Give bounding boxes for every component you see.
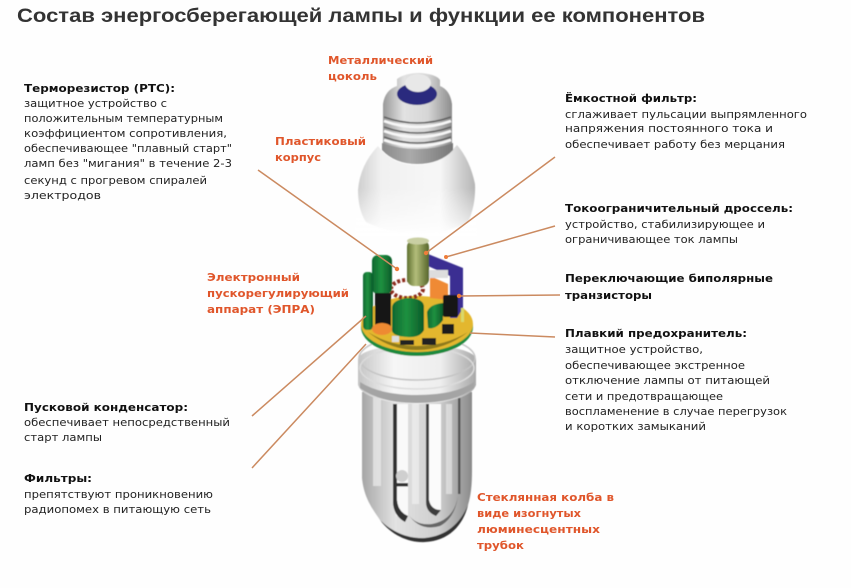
- text block: filters: Фильтры:: [24, 473, 92, 485]
- text block: capacitive filter: обеспечивает работу без мерцания: [565, 139, 785, 151]
- text block: filters: радиопомех в питающую сеть: [24, 504, 211, 516]
- text block: filters: [24, 473, 213, 516]
- choke: [428, 254, 463, 318]
- text block: fuse: и коротких замыканий: [565, 421, 706, 433]
- text block: thermistor: положительным температурным: [24, 113, 223, 125]
- label: electronic ballast: аппарат (ЭПРА): [207, 304, 315, 316]
- text block: starter capacitor: Пусковой конденсатор:: [24, 402, 188, 414]
- label: metal base: Металлический: [328, 55, 433, 67]
- label: metal base: [328, 55, 433, 83]
- label: metal base: цоколь: [328, 71, 377, 83]
- label: glass tube: виде изогнутых: [477, 508, 581, 520]
- text block: thermistor: Терморезистор (РТС):: [24, 83, 175, 95]
- collar: [358, 336, 476, 404]
- text block: capacitive filter: сглаживает пульсации выпрямленного: [565, 109, 807, 121]
- label: plastic housing: Пластиковый: [275, 136, 366, 148]
- illustration: energy-saving lamp exploded view: [355, 73, 477, 542]
- text block: choke: [565, 203, 793, 246]
- label: glass tube: трубок: [477, 540, 524, 552]
- electronic ballast: [361, 238, 473, 356]
- text block: filters: препятствуют проникновению: [24, 489, 213, 501]
- text block: capacitive filter: Ёмкостной фильтр:: [565, 91, 697, 105]
- text block: transistors: Переключающие биполярные: [565, 273, 773, 285]
- toroid coil: [391, 280, 423, 298]
- text block: thermistor: защитное устройство с: [24, 98, 167, 110]
- text block: fuse: Плавкий предохранитель:: [565, 328, 747, 340]
- text block: fuse: защитное устройство,: [565, 344, 703, 356]
- text block: thermistor: [24, 83, 232, 202]
- text block: transistors: транзисторы: [565, 290, 652, 302]
- text block: fuse: [565, 328, 787, 433]
- label: electronic ballast: [207, 272, 349, 316]
- capacitor filter: [407, 240, 429, 286]
- leader lines: [252, 157, 560, 468]
- metal base: [382, 73, 453, 164]
- label: electronic ballast: Электронный: [207, 272, 300, 284]
- text block: starter capacitor: старт лампы: [24, 432, 102, 444]
- title: Состав энергосберегающей лампы и функции ее компонентов: [17, 6, 705, 27]
- text block: starter capacitor: обеспечивает непосредственный: [24, 417, 230, 429]
- text block: choke: устройство, стабилизирующее и: [565, 219, 765, 231]
- text block: thermistor: электродов: [24, 190, 101, 202]
- text block: fuse: обеспечивающее экстренное: [565, 360, 745, 372]
- text block: thermistor: ламп без "мигания" в течение 2-3: [24, 158, 232, 170]
- black transistors: [375, 293, 391, 329]
- text block: fuse: отключение лампы от питающей: [565, 375, 770, 387]
- label: glass tube: Стеклянная колба в: [477, 492, 614, 504]
- text block: choke: Токоограничительный дроссель:: [565, 203, 793, 215]
- label: plastic housing: корпус: [275, 152, 321, 164]
- glass tubes: [362, 392, 472, 542]
- small parts: [442, 324, 454, 334]
- text block: choke: ограничивающее ток лампы: [565, 234, 738, 246]
- text block: starter capacitor: [24, 402, 230, 444]
- label: glass tube: [477, 492, 614, 552]
- text block: transistors: [565, 273, 773, 302]
- label: electronic ballast: пускорегулирующий: [207, 288, 349, 300]
- text block: capacitive filter: напряжения постоянного тока и: [565, 123, 773, 135]
- label: glass tube: люминесцентных: [477, 524, 600, 536]
- text block: fuse: воспламенение в случае перегрузок: [565, 406, 787, 418]
- text block: fuse: сети и предотвращающее: [565, 391, 723, 403]
- plastic housing: [355, 145, 477, 236]
- tall green capacitors: [372, 255, 392, 294]
- text block: capacitive filter: [565, 91, 807, 151]
- leader end markers: [395, 251, 461, 298]
- text block: thermistor: коэффициентом сопротивления,: [24, 128, 227, 140]
- large green capacitors: [392, 298, 424, 337]
- text block: thermistor: секунд с прогревом спиралей: [24, 175, 207, 187]
- label: plastic housing: [275, 136, 366, 164]
- text block: thermistor: обеспечивающее "плавный старт": [24, 143, 232, 155]
